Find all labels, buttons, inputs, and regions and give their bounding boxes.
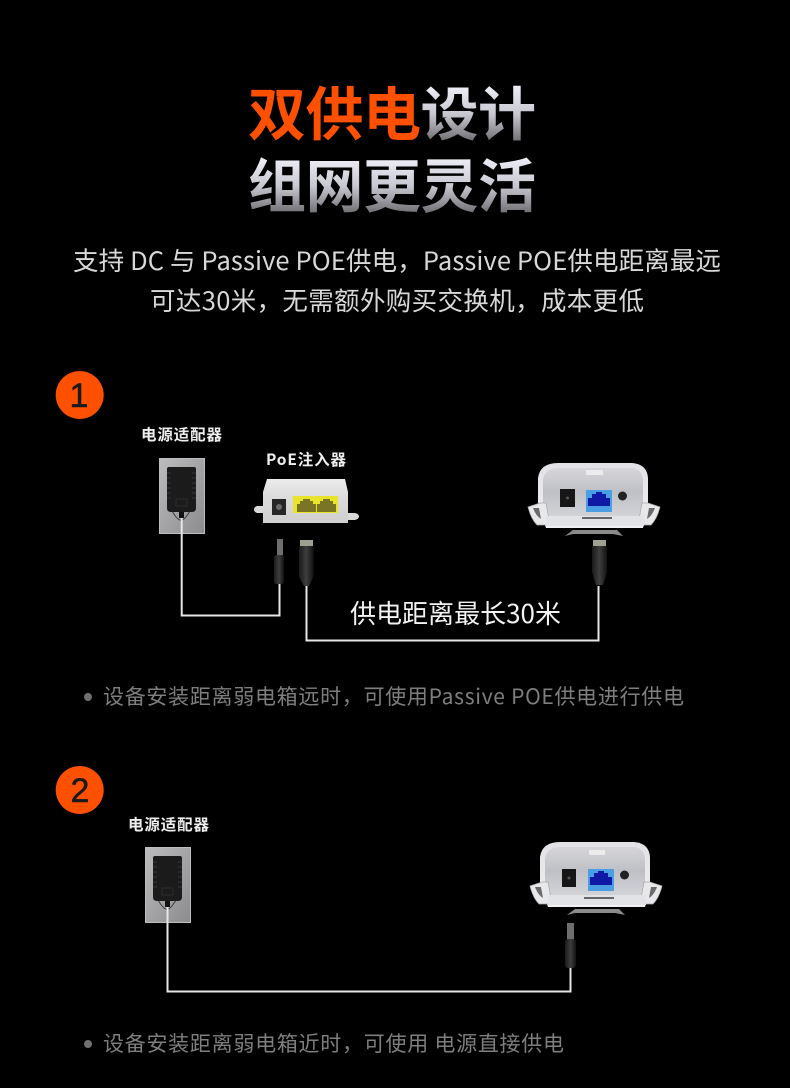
icon: PoE injector — [254, 479, 359, 523]
connector: RJ45 plug left — [299, 540, 314, 586]
note 1: 设备安装距离弱电箱远时，可使用Passive POE供电进行供电 — [103, 681, 684, 711]
connector: RJ45 plug right — [592, 540, 607, 585]
icon: wall power adapter 2 — [146, 848, 190, 922]
title: 组网更灵活 — [248, 140, 536, 224]
icon: wall power adapter 1 — [160, 458, 204, 534]
step badge 1 — [56, 371, 104, 419]
cable: adapter to injector — [182, 518, 280, 616]
subtitle text: 可达30米，无需额外购买交换机，成本更低 — [150, 281, 644, 318]
label: PoE injector: PoE注入器 — [266, 448, 346, 470]
title — [248, 68, 536, 224]
label: power adapter 2: 电源适配器 — [128, 813, 209, 835]
step badge 2: 2 — [71, 772, 89, 810]
note 2: 设备安装距离弱电箱近时，可使用 电源直接供电 — [103, 1028, 564, 1058]
connector: DC barrel plug 2 — [565, 923, 576, 968]
icon: access point 1 — [528, 463, 660, 536]
subtitle text — [73, 241, 721, 318]
title: 双供电设计 — [248, 68, 536, 152]
subtitle text: 支持 DC 与 Passive POE供电，Passive POE供电距离最远 — [73, 241, 721, 278]
step badge 1: 1 — [70, 377, 88, 415]
icon: access point 2 — [530, 842, 662, 915]
label: max distance: 供电距离最长30米 — [350, 594, 561, 631]
cable: 30m power line — [306, 586, 598, 640]
step badge 2 — [56, 766, 104, 814]
cable: adapter to access point — [168, 907, 570, 992]
connector: DC barrel plug 1 — [274, 539, 284, 584]
label: power adapter 1: 电源适配器 — [141, 423, 222, 445]
